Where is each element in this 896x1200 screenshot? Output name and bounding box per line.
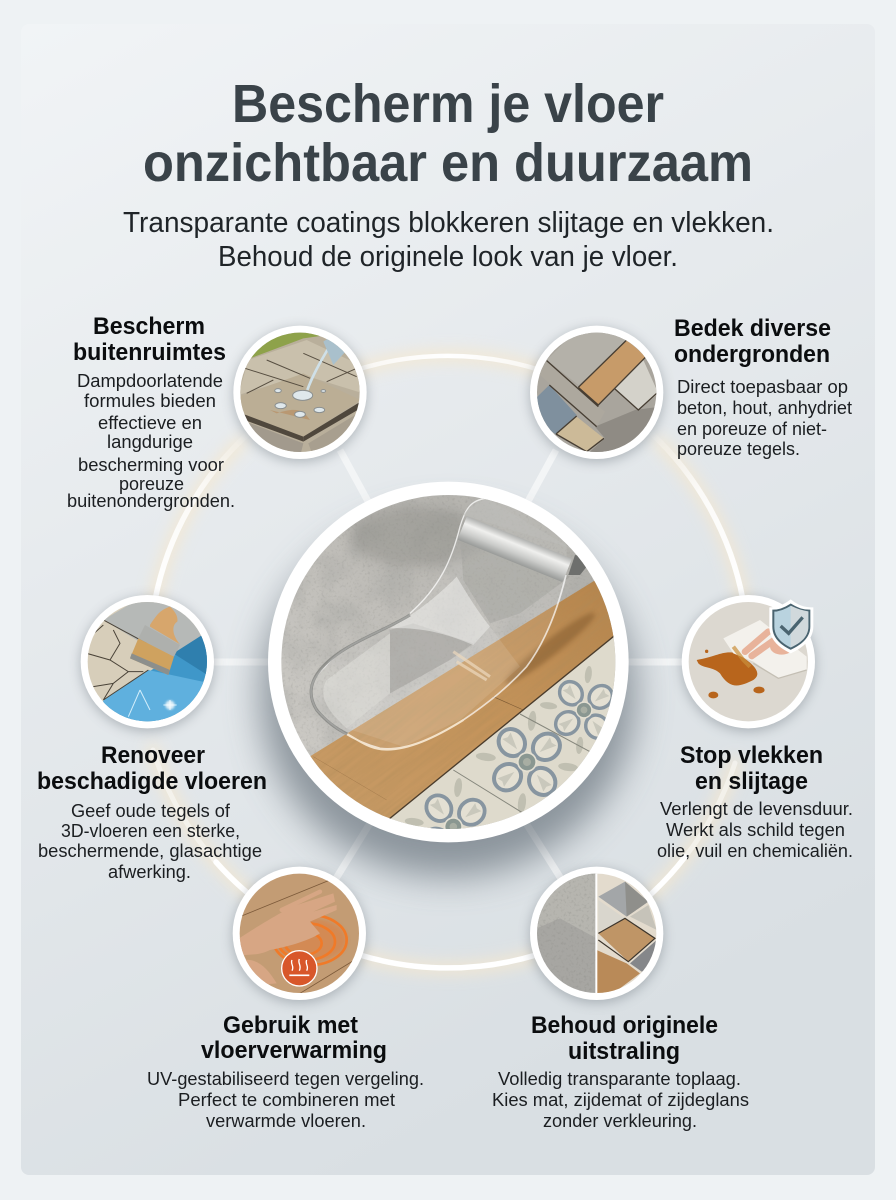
text block: Bescherm buitenruimtes: buitenruimtes [73, 339, 226, 366]
text block: Stop vlekken en slijtage: Stop vlekken [680, 742, 823, 769]
text block: Bescherm buitenruimtes: effectieve en [98, 413, 202, 433]
text block: Renoveer beschadigde vloeren: 3D-vloeren een sterke, [61, 821, 240, 841]
node: original look split icon [530, 867, 663, 1003]
text block: Stop vlekken en slijtage: olie, vuil en chemicaliën. [657, 841, 853, 861]
text block: Renoveer beschadigde vloeren [37, 742, 267, 882]
text block: Bedek diverse ondergronden: Direct toepasbaar op [677, 377, 848, 397]
text block: Renoveer beschadigde vloeren: beschermende, glasachtige [38, 841, 262, 861]
text block: Bescherm buitenruimtes: buitenondergronden. [67, 491, 235, 511]
node: stain protection icon [682, 595, 815, 731]
text block: Bescherm buitenruimtes: Bescherm [93, 313, 205, 340]
brush [130, 607, 180, 675]
node: bedek diverse ondergronden icon [530, 326, 663, 462]
text block: Bescherm buitenruimtes: bescherming voor [78, 455, 224, 475]
title: Bescherm je vloer [232, 74, 664, 134]
text block: Behoud originele uitstraling: uitstraling [568, 1038, 680, 1065]
text block: Gebruik met vloerverwarming [147, 1012, 424, 1131]
text block: Bedek diverse ondergronden: ondergronden [674, 341, 830, 368]
text block: Bescherm buitenruimtes [67, 313, 235, 511]
central illustration: clear coating on concrete, wood and tiles [268, 482, 629, 842]
text block: Behoud originele uitstraling: Behoud originele [531, 1012, 718, 1039]
text block: Bescherm buitenruimtes: poreuze [119, 474, 184, 494]
text block: Bescherm buitenruimtes: Dampdoorlatende [77, 371, 223, 391]
central soft shadow [260, 513, 636, 877]
subtitle: Behoud de originele look van je vloer. [218, 241, 678, 273]
title [143, 74, 753, 193]
text block: Gebruik met vloerverwarming: Gebruik met [223, 1012, 358, 1039]
text block: Bescherm buitenruimtes: formules bieden [84, 391, 216, 411]
transparent film [311, 498, 567, 750]
text block: Stop vlekken en slijtage: en slijtage [695, 768, 808, 795]
text block: Behoud originele uitstraling: Volledig transparante toplaag. [498, 1069, 741, 1089]
text block: Bescherm buitenruimtes: langdurige [107, 432, 193, 452]
text block: Bedek diverse ondergronden: beton, hout, anhydriet [677, 398, 852, 418]
text block: Stop vlekken en slijtage: Verlengt de levensduur. [660, 799, 853, 819]
text block: Bedek diverse ondergronden: en poreuze of niet- [677, 419, 827, 439]
wood plank band [310, 580, 614, 818]
subtitle [123, 207, 774, 273]
shield badge [769, 599, 813, 653]
roller [458, 510, 586, 582]
text block: Bedek diverse ondergronden: Bedek diverse [674, 315, 831, 342]
node: outdoor pavers icon [233, 326, 367, 462]
patterned cement tiles [389, 636, 616, 829]
title: onzichtbaar en duurzaam [143, 133, 753, 193]
text block: Stop vlekken en slijtage: Werkt als schild tegen [666, 820, 845, 840]
text block: Stop vlekken en slijtage [657, 742, 853, 861]
text block: Renoveer beschadigde vloeren: beschadigde vloeren [37, 768, 267, 795]
text block: Gebruik met vloerverwarming: UV-gestabiliseerd tegen vergeling. [147, 1069, 424, 1089]
node: renovation brush icon [81, 595, 214, 731]
subtitle: Transparante coatings blokkeren slijtage en vlekken. [123, 207, 774, 239]
spill [697, 652, 757, 685]
text block: Bedek diverse ondergronden: poreuze tegels. [677, 439, 800, 459]
diagram connectors: glowing ring arcs and spokes [153, 356, 743, 968]
concrete floor [281, 495, 616, 829]
text block: Renoveer beschadigde vloeren: afwerking. [108, 862, 191, 882]
text block: Behoud originele uitstraling: zonder verkleuring. [543, 1111, 697, 1131]
text block: Renoveer beschadigde vloeren: Geef oude tegels of [71, 801, 231, 821]
text block: Behoud originele uitstraling: Kies mat, zijdemat of zijdeglans [492, 1090, 749, 1110]
text block: Gebruik met vloerverwarming: vloerverwarming [201, 1037, 387, 1064]
node: underfloor heating icon [233, 867, 366, 1003]
text block: Bedek diverse ondergronden [674, 315, 852, 459]
text block: Renoveer beschadigde vloeren: Renoveer [101, 742, 205, 769]
text block: Behoud originele uitstraling [492, 1012, 749, 1131]
cloth [723, 620, 807, 678]
text block: Gebruik met vloerverwarming: verwarmde vloeren. [206, 1111, 366, 1131]
text block: Gebruik met vloerverwarming: Perfect te combineren met [178, 1090, 395, 1110]
heat badge [282, 951, 317, 986]
